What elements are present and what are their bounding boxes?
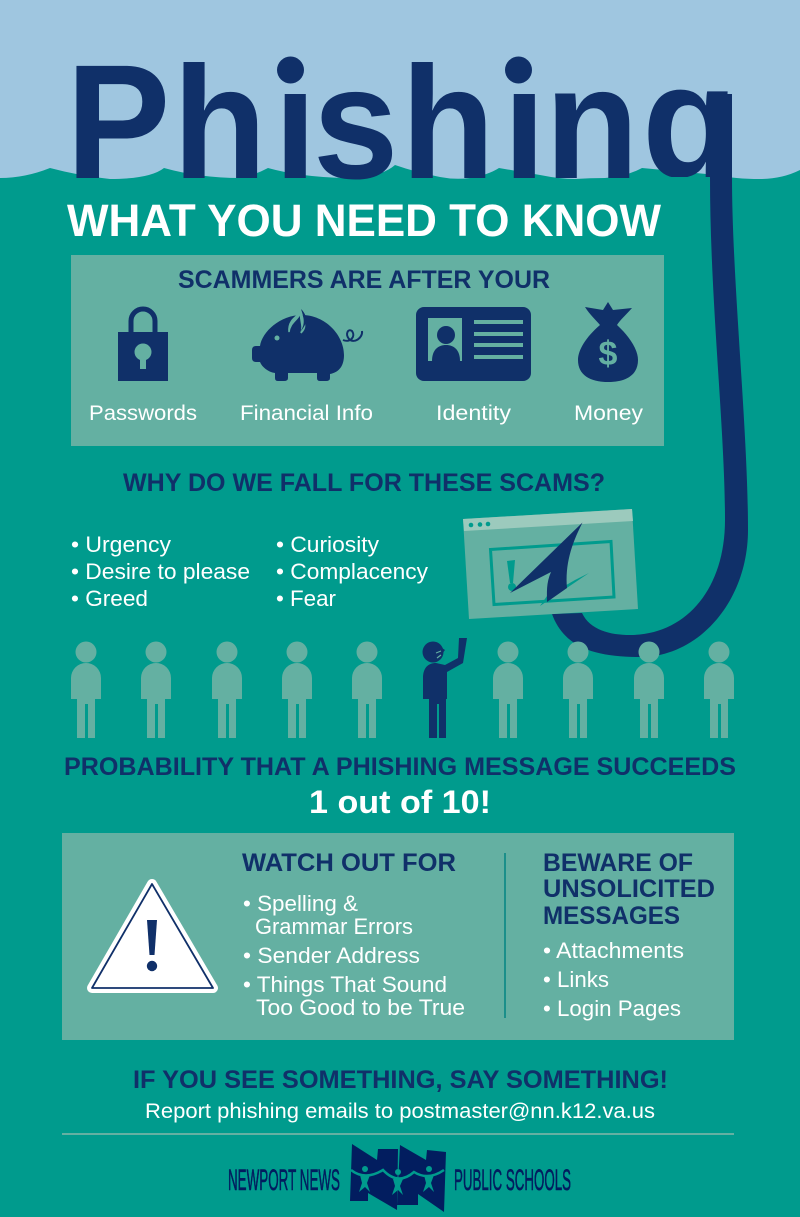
list: reasons column two [276, 532, 428, 611]
list: reasons column one: • Greed [71, 586, 148, 611]
icon: hook tip [510, 522, 582, 602]
heading: probability: PROBABILITY THAT A PHISHING MESSAGE SUCCEEDS [64, 753, 736, 781]
list: watch out for: • Sender Address [243, 943, 420, 968]
list: reasons column two: • Curiosity [276, 532, 379, 557]
panel: scammers are after your [71, 255, 664, 446]
statistic: one out of ten: 1 out of 10! [309, 784, 491, 820]
heading: why do we fall: WHY DO WE FALL FOR THESE SCAMS? [123, 469, 605, 497]
person 5 [352, 642, 382, 738]
icon: money bag: $ [599, 335, 618, 373]
title [76, 56, 728, 180]
list: beware of: • Login Pages [543, 996, 681, 1021]
label: financial info: Financial Info [240, 401, 373, 425]
heading: beware of unsolicited messages: BEWARE OF [543, 849, 693, 877]
panel: watch out and beware [62, 833, 734, 1040]
list: watch out for [243, 891, 465, 1020]
label: passwords: Passwords [89, 401, 197, 425]
icon: money bag [578, 302, 638, 382]
panel heading: SCAMMERS ARE AFTER YOUR [178, 266, 550, 294]
list: watch out for: • Spelling & [243, 891, 358, 916]
call to action: IF YOU SEE SOMETHING, SAY SOMETHING! [133, 1066, 668, 1094]
label: money: Money [574, 401, 643, 425]
person 4 [282, 642, 312, 738]
footer logo [228, 1144, 571, 1212]
heading: beware of unsolicited messages: MESSAGES [543, 902, 680, 930]
list: reasons column one: • Desire to please [71, 559, 250, 584]
list: reasons column one [71, 532, 250, 611]
list: watch out for: • Things That Sound [243, 972, 447, 997]
subtitle: WHAT YOU NEED TO KNOW [67, 195, 662, 246]
title: Phishing [66, 30, 738, 214]
list: reasons column one: • Urgency [71, 532, 171, 557]
list: watch out for: Grammar Errors [255, 914, 413, 939]
list: reasons column two: • Fear [276, 586, 336, 611]
list: beware of: • Links [543, 967, 609, 992]
people row [71, 638, 734, 738]
list: beware of: • Attachments [543, 938, 684, 963]
heading: watch out for: WATCH OUT FOR [242, 849, 456, 877]
report instructions: Report phishing emails to postmaster@nn.k12.va.us [145, 1100, 655, 1123]
logo mark [350, 1144, 446, 1212]
fishing hook line [552, 94, 748, 657]
text: PUBLIC SCHOOLS [454, 1164, 571, 1197]
person 9 [634, 642, 664, 738]
list: beware of [543, 938, 684, 1021]
person 8 [563, 642, 593, 738]
icon: identity card [416, 307, 531, 381]
person 6: phished person [422, 638, 467, 738]
heading: beware of unsolicited messages: UNSOLICITED [543, 875, 715, 903]
list: reasons column two: • Complacency [276, 559, 428, 584]
list: watch out for: Too Good to be True [256, 995, 465, 1020]
icon: padlock [118, 309, 168, 381]
sky and wave background [0, 0, 800, 179]
person 3 [212, 642, 242, 738]
heading: beware of unsolicited messages [543, 849, 715, 930]
icon: warning triangle [92, 884, 213, 988]
person 10 [704, 642, 734, 738]
icon: piggy bank [252, 309, 362, 381]
person 7 [493, 642, 523, 738]
label: identity: Identity [436, 401, 511, 425]
person 2 [141, 642, 171, 738]
icon: browser window with alert [463, 509, 638, 619]
footer logo: NEWPORT NEWS [228, 1164, 340, 1197]
person 1 [71, 642, 101, 738]
